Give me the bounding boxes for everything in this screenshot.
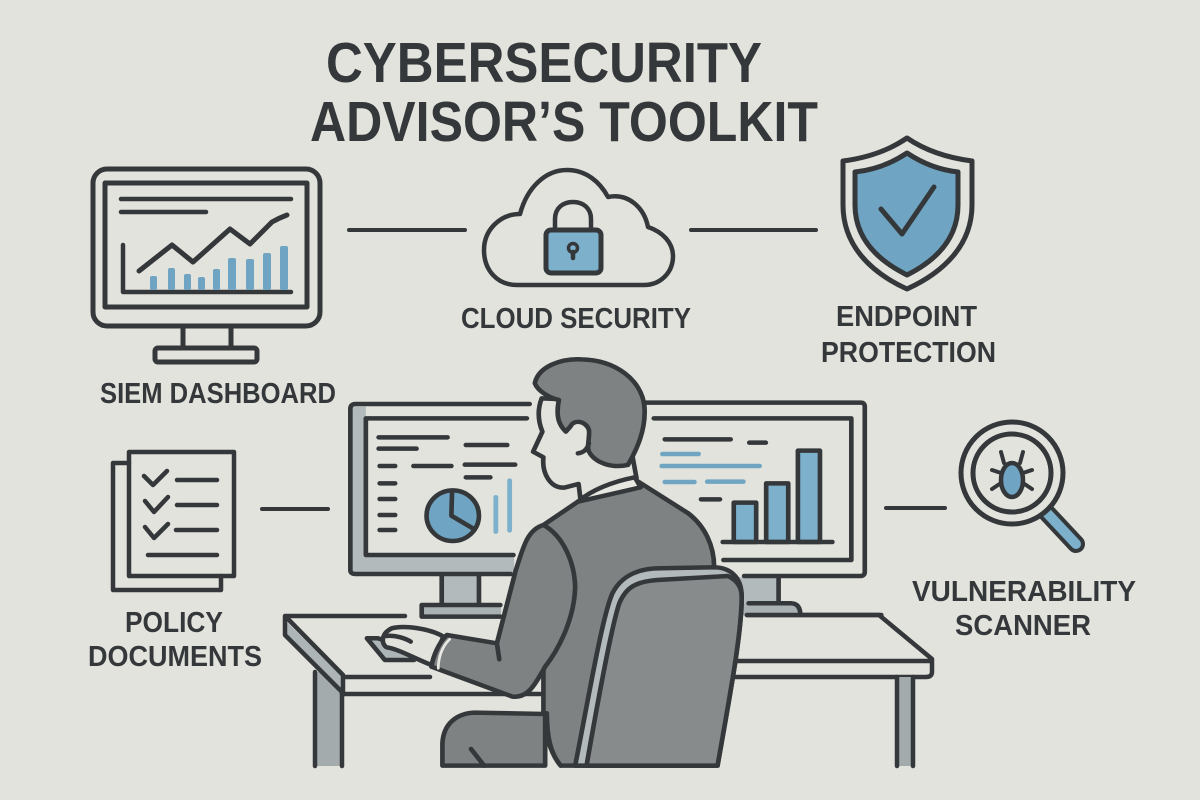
jacket torso [543,482,714,766]
label: endpoint protection: ENDPOINT [836,301,977,333]
label: policy documents: DOCUMENTS [88,641,262,673]
icon: cloud security padlock [484,170,673,285]
hand [383,627,443,665]
connector: cloud to shield [691,228,816,232]
face [533,398,637,498]
connector: documents to workstation [262,507,328,511]
left monitor [350,404,530,617]
title [310,31,818,154]
hair [535,359,645,466]
label: SIEM dashboard: SIEM DASHBOARD [100,378,336,410]
arm [431,525,575,697]
label: vulnerability scanner: SCANNER [955,610,1091,642]
label: policy documents: POLICY [125,607,223,639]
right screen bar chart [723,451,832,542]
office chair [575,567,742,766]
connector: SIEM to cloud [349,228,465,232]
left screen blue bars [496,481,510,532]
collar [578,477,641,502]
icon: SIEM dashboard monitor [93,169,320,362]
connector: workstation to scanner [886,506,945,510]
advisor figure at desk [367,359,714,766]
right screen text lines [665,439,766,499]
desk [285,615,932,766]
thigh [442,713,545,766]
left screen text lines [379,437,515,530]
pie chart [427,490,479,541]
label: vulnerability scanner: VULNERABILITY [912,576,1136,608]
title: ADVISOR’S TOOLKIT [310,90,818,154]
icon: policy documents checklist [113,452,234,590]
label: vulnerability scanner [912,576,1136,642]
label: cloud security: CLOUD SECURITY [461,303,691,335]
label: policy documents [88,607,262,673]
title: CYBERSECURITY [326,31,762,95]
right monitor [645,403,881,615]
mouse [367,638,414,660]
icon: endpoint protection shield [843,138,972,289]
label: endpoint protection [821,301,996,369]
icon: vulnerability scanner magnifier [961,422,1076,544]
label: endpoint protection: PROTECTION [821,337,996,369]
